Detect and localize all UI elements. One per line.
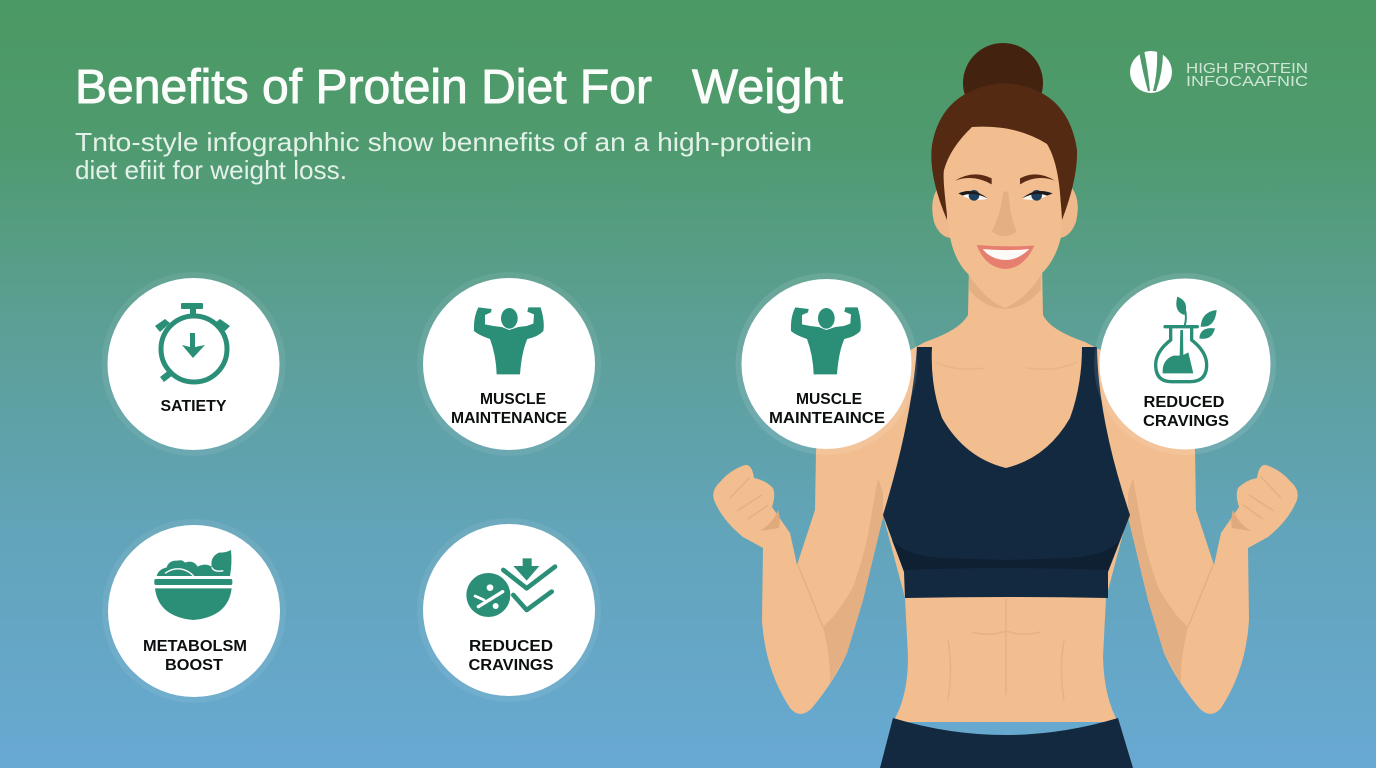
- title: Benefits of Protein Diet For: [75, 61, 652, 114]
- panel: muscle maintenance 1: [417, 272, 601, 456]
- panel: reduced cravings 2: [1094, 273, 1276, 455]
- face: [944, 127, 1061, 298]
- logo: [1130, 50, 1308, 93]
- sports bra: [883, 347, 1130, 598]
- icon: muscle torso: [474, 307, 544, 374]
- panel: reduced cravings 1: [417, 518, 601, 702]
- label: MUSCLE: [480, 391, 546, 408]
- label: [468, 638, 554, 674]
- label: MAINTENANCE: [451, 410, 567, 427]
- left arm: [713, 338, 905, 714]
- icon: percent and down arrows: [466, 558, 555, 617]
- shorts: [880, 718, 1133, 768]
- panel: metabolism boost: [102, 519, 286, 703]
- label: METABOLSM: [143, 638, 247, 655]
- hair: [931, 83, 1077, 220]
- logo text: HIGH PROTEIN: [1186, 61, 1308, 77]
- logo text: [1186, 61, 1308, 90]
- hair bun: [963, 43, 1043, 123]
- label: [1143, 394, 1229, 430]
- icon: logo mark: [1130, 50, 1172, 93]
- panel: muscle maintenance 2: [736, 273, 918, 455]
- label: [143, 638, 247, 674]
- label: [451, 391, 567, 427]
- icon: stopwatch: [155, 303, 230, 382]
- label: MAINTEAINCE: [769, 410, 885, 427]
- label: CRAVINGS: [468, 657, 554, 674]
- icon: flask with leaves: [1156, 297, 1217, 382]
- torso and neck: [883, 265, 1128, 722]
- logo text: INFOCAAFNIC: [1186, 74, 1308, 90]
- label: MUSCLE: [796, 391, 862, 408]
- subtitle: [75, 127, 812, 185]
- face details: [955, 174, 1055, 269]
- head: [931, 43, 1078, 298]
- label: CRAVINGS: [1143, 413, 1229, 430]
- title: Weight: [692, 61, 843, 114]
- label: [769, 391, 885, 427]
- label: BOOST: [165, 657, 223, 674]
- icon: muscle torso: [791, 307, 861, 374]
- icon: food bowl: [154, 550, 232, 620]
- label: REDUCED: [469, 638, 553, 655]
- label: SATIETY: [160, 398, 227, 415]
- ears: [932, 188, 1078, 238]
- subtitle: Tnto-style infographhic show bennefits of an a high-protiein: [75, 127, 812, 157]
- label: REDUCED: [1144, 394, 1224, 411]
- subtitle: diet efiit for weight loss.: [75, 155, 347, 185]
- figure: smiling woman: [713, 43, 1298, 768]
- right arm: [1106, 338, 1298, 714]
- panel: satiety: [102, 272, 286, 456]
